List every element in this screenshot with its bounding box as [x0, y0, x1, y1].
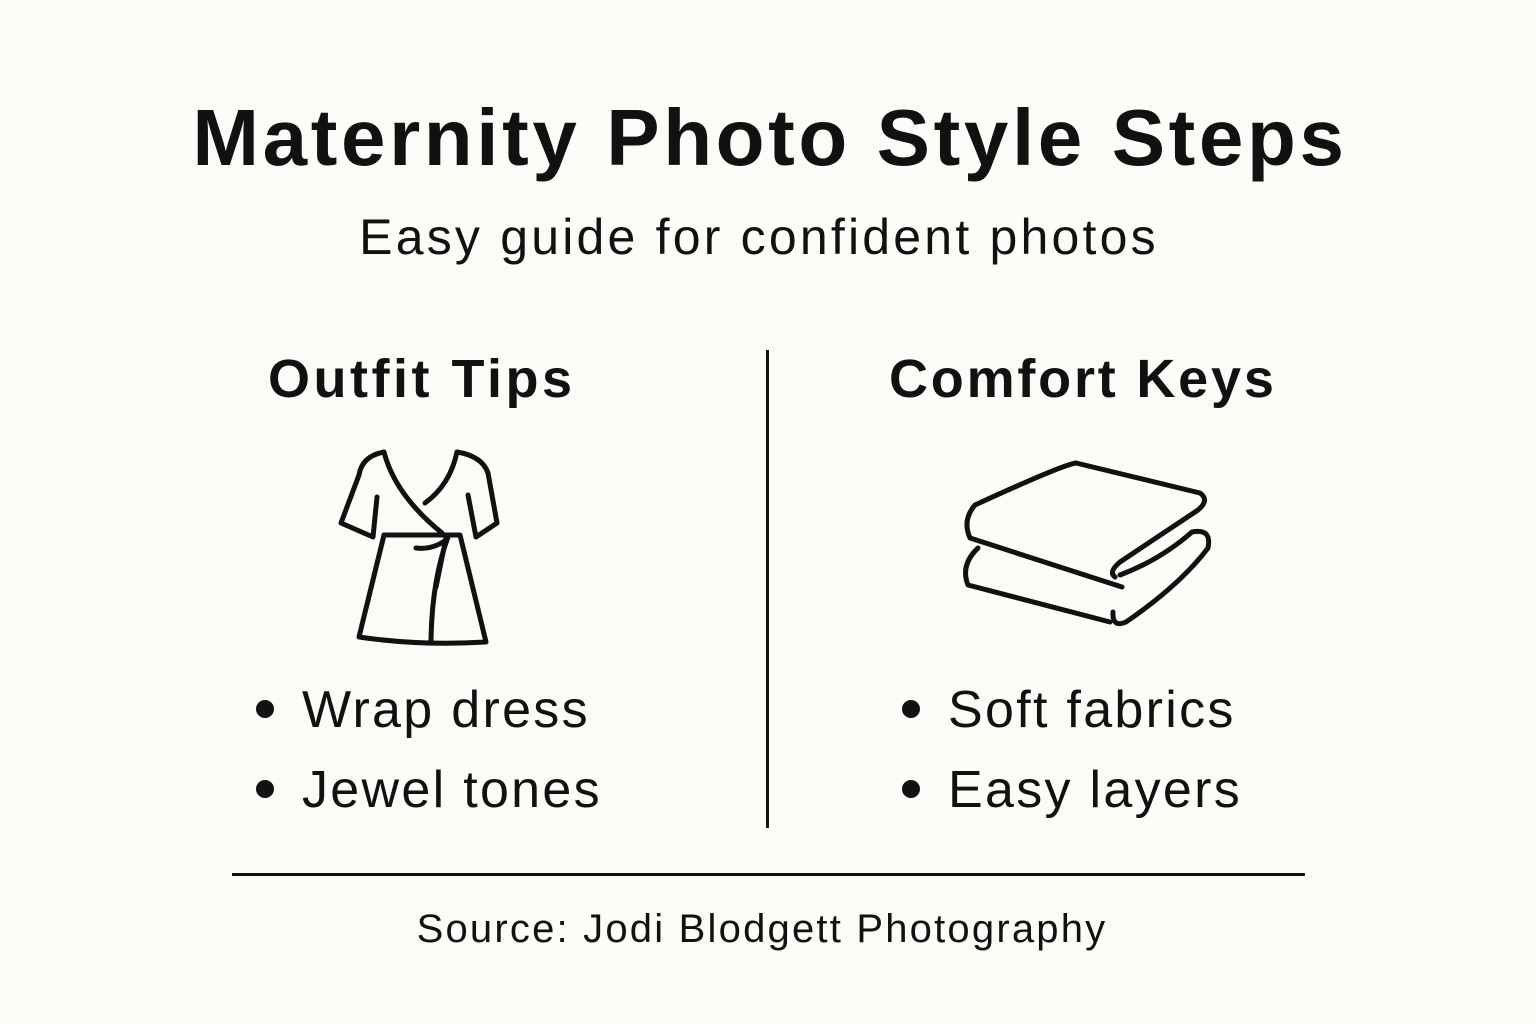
heading: outfit tips: Outfit Tips [268, 349, 575, 409]
title: Maternity Photo Style Steps [192, 93, 1348, 182]
vertical divider [766, 350, 769, 828]
list: outfit tips: Wrap dress [302, 681, 590, 739]
source note: Source: Jodi Blodgett Photography [417, 907, 1107, 951]
horizontal rule [232, 873, 1305, 876]
list: comfort keys [902, 681, 1242, 819]
subtitle: Easy guide for confident photos [359, 209, 1159, 265]
list: comfort keys: Easy layers [948, 761, 1242, 819]
heading: comfort keys: Comfort Keys [889, 349, 1277, 409]
list: comfort keys: Soft fabrics [948, 681, 1236, 739]
list: outfit tips [256, 681, 602, 819]
list: outfit tips: Jewel tones [302, 761, 602, 819]
